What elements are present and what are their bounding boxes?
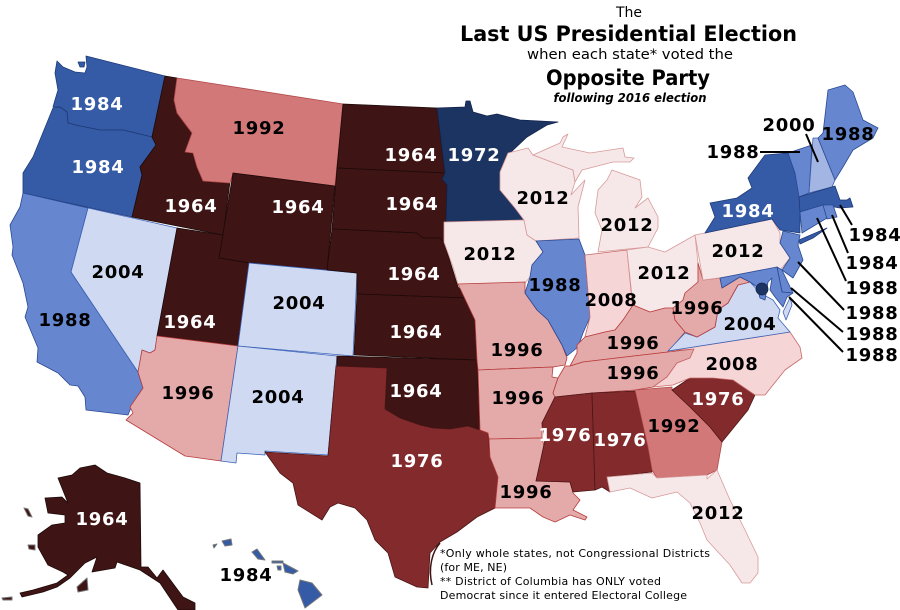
state: Arizona (126, 336, 238, 461)
label: ME: 1988 (822, 124, 874, 145)
island: Lanai (277, 566, 281, 570)
state: Alabama (592, 391, 652, 492)
state: South Carolina (672, 378, 755, 442)
island: Aleutian (2, 597, 12, 600)
state: Utah (157, 228, 249, 346)
state: New York Long Island (799, 228, 827, 244)
island: Oahu (252, 549, 265, 560)
state: Washington (53, 56, 165, 137)
state: Georgia (635, 387, 722, 478)
state: Delaware (777, 267, 793, 293)
leader: Maryland (789, 297, 843, 352)
label: WA: 1984 (71, 94, 123, 115)
label: MD: 1988 (846, 345, 898, 366)
label: NC: 2008 (706, 354, 758, 375)
state: Pennsylvania (695, 219, 790, 280)
label: SC: 1976 (692, 389, 744, 410)
label: MI: 2012 (601, 215, 653, 236)
label: AL: 1976 (594, 430, 646, 451)
label: KY: 1996 (607, 333, 659, 354)
leader: New Hampshire (806, 134, 818, 162)
label: OR: 1984 (72, 157, 124, 178)
label: CT: 1988 (846, 278, 898, 299)
label: UT: 1964 (164, 312, 216, 333)
state: Hawaii (213, 539, 322, 608)
island: Padre Island (430, 543, 440, 585)
state year labels (39, 94, 900, 586)
label: MT: 1992 (233, 118, 285, 139)
label: AK: 1964 (76, 509, 128, 530)
label: LA: 1996 (500, 482, 552, 503)
label: TN: 1996 (607, 363, 659, 384)
state: Kansas (354, 294, 477, 360)
island: Niihau (213, 544, 217, 548)
state: Kentucky (570, 305, 685, 366)
label: CO: 2004 (273, 293, 325, 314)
island: Nunivak (28, 545, 35, 550)
state: Wisconsin (500, 148, 585, 241)
state: Iowa (444, 220, 543, 284)
state: Mississippi (536, 393, 595, 492)
island: Kodiak (77, 578, 88, 592)
state: North Carolina (653, 332, 802, 395)
label: NH: 2000 (763, 115, 815, 136)
island: Maui (283, 563, 298, 574)
title line: The: The (615, 5, 642, 21)
label: NJ: 1988 (846, 303, 898, 324)
label: FL: 2012 (692, 503, 744, 524)
leader: Massachusetts (840, 205, 852, 225)
state: Vermont (788, 145, 812, 197)
label: NY: 1984 (722, 201, 774, 222)
state: New Mexico (221, 346, 337, 463)
label: NM: 2004 (252, 387, 304, 408)
state: Virginia (668, 282, 790, 351)
state: Maine (818, 85, 878, 180)
state: New Hampshire (809, 138, 835, 193)
label: ND: 1964 (385, 145, 437, 166)
label: MA: 1984 (849, 225, 900, 246)
state: Wyoming (219, 173, 335, 270)
label: RI: 1984 (846, 253, 898, 274)
title line: Opposite Party: Opposite Party (546, 66, 710, 90)
state: California (10, 193, 143, 415)
Alaska islands (2, 508, 88, 600)
state: New Jersey (780, 231, 803, 278)
state: Oklahoma (337, 356, 480, 430)
state: Minnesota (437, 101, 558, 222)
label: MO: 1996 (491, 340, 543, 361)
state: Louisiana (489, 438, 587, 522)
label: PA: 2012 (712, 241, 764, 262)
label: VT: 1988 (707, 142, 759, 163)
state: Nevada (71, 208, 177, 372)
leader: Delaware (791, 288, 843, 332)
state: Connecticut (800, 205, 827, 233)
label: WV: 1996 (671, 298, 723, 319)
label: ID: 1964 (165, 196, 217, 217)
state: Ohio (627, 235, 698, 312)
leader: Rhode Island (832, 215, 848, 253)
state: Virginia eastern shore (783, 298, 792, 320)
state: Montana (174, 78, 343, 186)
state: Oregon (23, 107, 156, 217)
label: VA: 2004 (724, 314, 776, 335)
footnotes (440, 547, 710, 602)
state: North Dakota (337, 104, 445, 173)
marker: District of Columbia (756, 283, 768, 295)
title block (460, 5, 797, 105)
state: Michigan upper peninsula (533, 134, 634, 182)
state: Nebraska (327, 229, 467, 298)
label: AR: 1996 (492, 388, 544, 409)
label: HI: 1984 (220, 565, 272, 586)
state: Idaho (132, 76, 230, 235)
state: Rhode Island (823, 205, 837, 219)
state: Tennessee (553, 349, 694, 397)
label: DE: 1988 (846, 324, 898, 345)
title line: main heading: Last US Presidential Election (460, 22, 797, 46)
footnote line 3: ** District of Columbia has ONLY voted (440, 575, 661, 588)
state: Missouri (458, 282, 567, 370)
label: KS: 1964 (390, 322, 442, 343)
label: WY: 1964 (272, 197, 324, 218)
footnote line 4: Democrat since it entered Electoral College (440, 589, 687, 602)
state: Michigan lower peninsula (595, 170, 658, 252)
footnote line 2: (for ME, NE) (440, 561, 507, 574)
label: CA: 1988 (39, 310, 91, 331)
footnote line 1: *Only whole states, not Congressional Districts (440, 547, 710, 560)
island: Big Island (298, 580, 322, 608)
label: AZ: 1996 (162, 383, 214, 404)
label: NV: 2004 (92, 262, 144, 283)
title line: subheading: when each state* voted the (527, 47, 733, 63)
island: Molokai (272, 561, 283, 563)
state: South Dakota (332, 168, 447, 242)
state: New York (705, 153, 800, 233)
state: Massachusetts (799, 186, 853, 212)
leader: Vermont (760, 151, 800, 153)
label: IL: 1988 (529, 275, 581, 296)
leader: Connecticut (817, 218, 846, 281)
label: GA: 1992 (648, 416, 700, 437)
label: TX: 1976 (391, 451, 443, 472)
label: IA: 2012 (464, 244, 516, 265)
title line: following 2016 election: following 2016 election (554, 91, 706, 105)
state: Illinois (525, 239, 590, 356)
state: Florida (607, 470, 758, 583)
islands: San Juan (78, 62, 85, 67)
state: Indiana (585, 250, 633, 337)
label: MS: 1976 (539, 425, 591, 446)
state: Texas (265, 366, 498, 588)
label: MN: 1972 (448, 145, 500, 166)
state: West Virginia (673, 263, 750, 337)
label: NE: 1964 (388, 264, 440, 285)
state: Alaska (20, 465, 195, 610)
state: Arkansas (478, 367, 558, 439)
island: St Lawrence (24, 508, 32, 517)
leader: New Jersey (798, 262, 844, 310)
label: IN: 2008 (585, 290, 637, 311)
label: SD: 1964 (386, 194, 438, 215)
label: OK: 1964 (390, 381, 442, 402)
state: Colorado (238, 263, 357, 356)
leader lines for small states (760, 134, 852, 352)
island: Kauai (222, 539, 232, 546)
label: OH: 2012 (638, 263, 690, 284)
state: Maryland (720, 267, 793, 307)
label: WI: 2012 (517, 188, 569, 209)
